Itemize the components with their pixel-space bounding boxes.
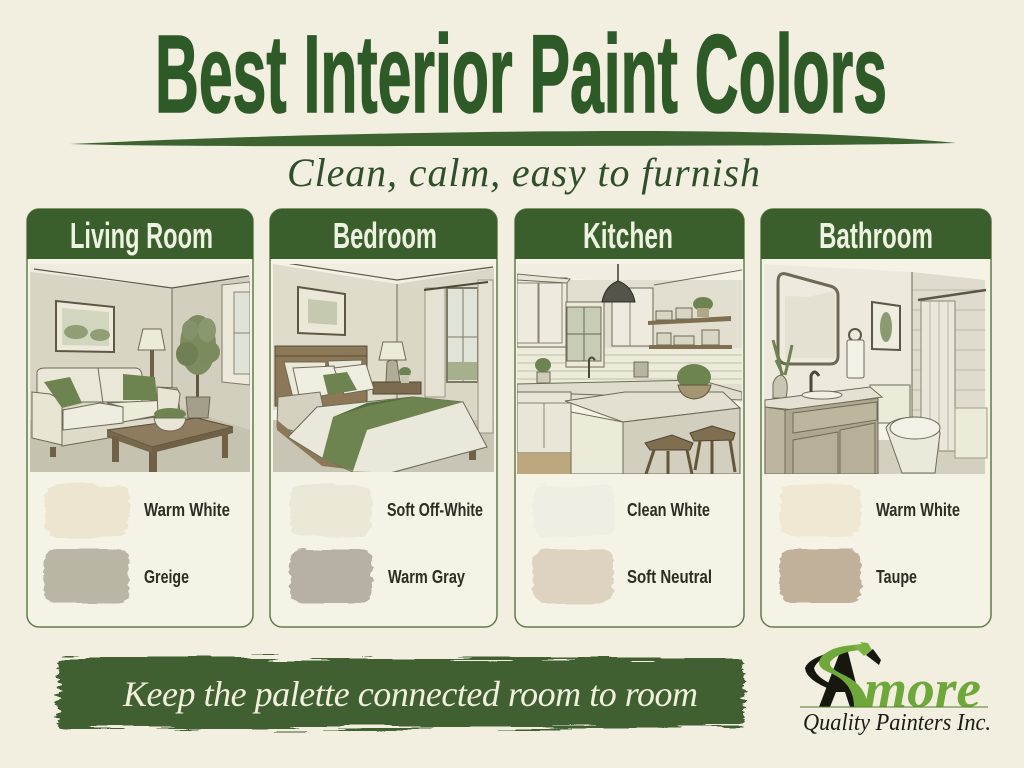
window and curtains bbox=[424, 280, 493, 433]
logo bbox=[800, 642, 991, 736]
small plants and faucet bbox=[535, 358, 648, 383]
label: warm white: Warm White bbox=[876, 500, 960, 520]
brush stroke under title bbox=[70, 131, 956, 146]
vase bbox=[773, 340, 792, 398]
panel: kitchen bbox=[515, 209, 744, 627]
framed leaf art bbox=[872, 302, 900, 350]
header: bathroom: Bathroom bbox=[819, 215, 933, 256]
label: taupe: Taupe bbox=[876, 567, 917, 587]
swatches: bathroom bbox=[780, 485, 861, 603]
bowl with plant bbox=[677, 364, 711, 399]
subtitle: Clean, calm, easy to furnish bbox=[287, 150, 760, 195]
lamp and nightstand bbox=[373, 342, 421, 394]
island bbox=[565, 392, 740, 474]
panel: living room bbox=[27, 209, 253, 627]
toilet bbox=[870, 385, 940, 473]
shelves bbox=[648, 297, 732, 349]
label: greige: Greige bbox=[144, 567, 189, 587]
label: warm white: Warm White bbox=[144, 500, 230, 520]
logo: underline bbox=[800, 706, 988, 708]
label: warm gray: Warm Gray bbox=[388, 567, 465, 587]
lower cabinets bbox=[517, 380, 742, 474]
panel: bedroom bbox=[270, 209, 497, 627]
pendant lamp bbox=[602, 262, 635, 302]
stools bbox=[645, 426, 735, 474]
picture bbox=[298, 287, 345, 335]
banner: Keep the palette connected room to room bbox=[122, 674, 698, 714]
pillows bbox=[284, 360, 374, 400]
panel: bathroom bbox=[761, 209, 991, 627]
header: living room: Living Room bbox=[70, 215, 213, 256]
header: bedroom bbox=[270, 209, 497, 259]
logo: black swoosh bbox=[805, 650, 838, 690]
picture bbox=[56, 301, 114, 352]
illustration: bathroom bbox=[764, 264, 987, 474]
header: bedroom: Bedroom bbox=[333, 215, 437, 256]
logo: more wordmark: more bbox=[864, 659, 981, 719]
illustration: living room bbox=[30, 264, 250, 474]
header: bathroom bbox=[761, 209, 991, 259]
towel bbox=[847, 329, 864, 378]
sofa bbox=[32, 368, 180, 457]
vanity bbox=[765, 372, 882, 474]
label: soft neutral: Soft Neutral bbox=[627, 567, 712, 587]
window bbox=[222, 282, 250, 385]
subway tiles bbox=[517, 355, 742, 379]
lamp bbox=[138, 329, 165, 380]
plant bbox=[176, 315, 220, 418]
shower curtain bbox=[918, 290, 987, 458]
logo: green swoosh bbox=[819, 645, 868, 707]
swatches: kitchen bbox=[533, 485, 615, 603]
swatches: living room bbox=[44, 485, 129, 603]
illustration: bedroom bbox=[273, 263, 494, 474]
coffee table bbox=[107, 418, 233, 474]
tile lines bbox=[912, 290, 985, 410]
upper cabinets bbox=[517, 274, 653, 347]
headboard bbox=[275, 346, 367, 406]
banner bbox=[58, 658, 744, 728]
swatches: bedroom bbox=[290, 485, 372, 603]
header: kitchen bbox=[515, 209, 744, 259]
window bbox=[566, 302, 604, 367]
logo: paint brush bbox=[852, 642, 881, 665]
header: kitchen: Kitchen bbox=[583, 215, 673, 256]
mirror bbox=[778, 274, 838, 364]
logo: letter A bbox=[819, 652, 862, 707]
illustration: kitchen bbox=[517, 262, 742, 474]
bed bbox=[277, 392, 487, 474]
bowl bbox=[154, 408, 186, 431]
header: living room bbox=[27, 209, 253, 259]
label: soft off-white: Soft Off-White bbox=[387, 500, 483, 520]
label: clean white: Clean White bbox=[627, 500, 710, 520]
logo: tagline: Quality Painters Inc. bbox=[803, 710, 991, 736]
